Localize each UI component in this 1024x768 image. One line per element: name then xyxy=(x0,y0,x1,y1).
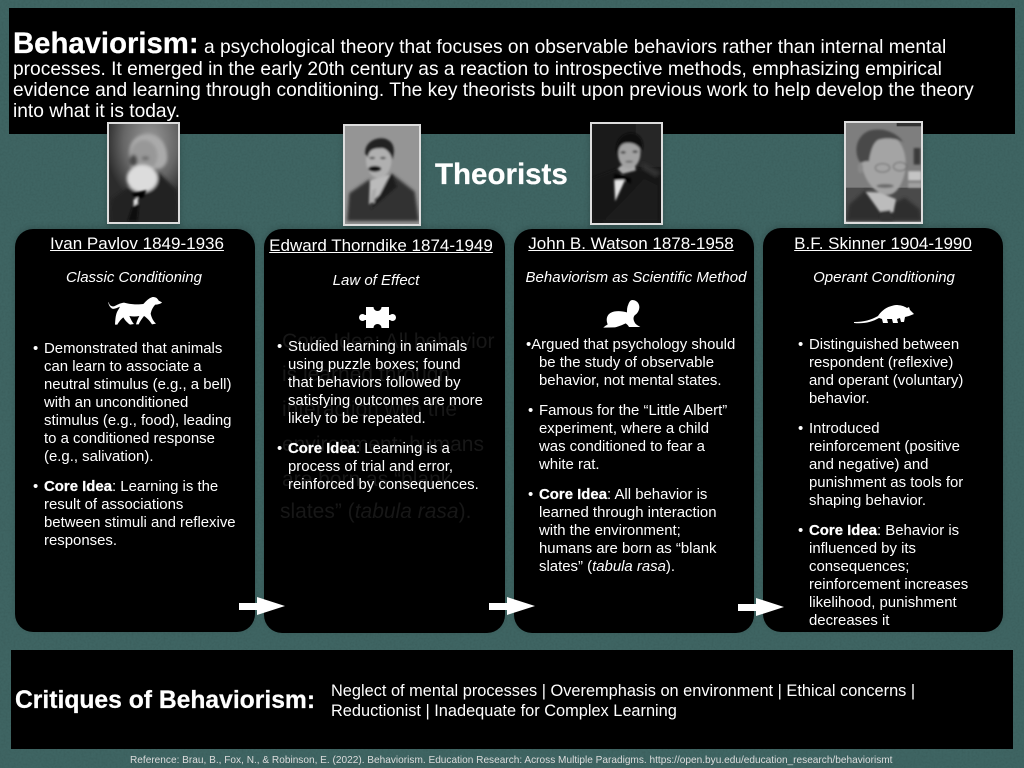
heading and definition text: evidence and learning through conditioning. The key theorists built upon previous work to help develop the theory xyxy=(13,80,974,101)
core idea: Thorndike xyxy=(277,440,479,493)
card subtitle: Operant Conditioning: Operant Conditioning xyxy=(813,269,955,286)
panel: critiques of behaviorism xyxy=(11,650,1013,749)
card title: B.F. Skinner: B.F. Skinner 1904-1990 xyxy=(794,234,972,253)
core idea: Watson: slates” (tabula rasa). xyxy=(539,558,675,575)
text: • xyxy=(798,420,803,437)
bullets: Skinner respondent and operant: respondent (reflexive) xyxy=(809,354,953,371)
bullets: Pavlov: to a conditioned response xyxy=(44,430,215,447)
bullets: Little Albert: white rat. xyxy=(539,456,600,473)
bullets: Thorndike xyxy=(277,338,483,427)
icon: puzzle piece xyxy=(359,307,396,328)
critiques list xyxy=(331,682,915,720)
critiques list: Reductionist | Inadequate for Complex Learning xyxy=(331,702,677,720)
text: • xyxy=(277,440,282,457)
ghost text behind Thorndike bullets: is learned through xyxy=(282,363,450,386)
core idea: Pavlov: Core Idea: Learning is the xyxy=(44,478,218,495)
bullets: Thorndike: satisfying outcomes are more xyxy=(288,392,483,409)
core idea: Skinner: consequences; xyxy=(809,558,909,575)
text: • xyxy=(798,336,803,353)
bullets: Skinner reinforcement: and negative) and xyxy=(809,456,928,473)
bullets: Watson argued xyxy=(526,336,735,389)
core idea: Skinner: Core Idea: Behavior is xyxy=(809,522,959,539)
bullets: Skinner reinforcement: Introduced xyxy=(809,420,880,437)
ghost text behind Thorndike bullets: interaction with the xyxy=(282,398,457,421)
core idea: Pavlov: result of associations xyxy=(44,496,183,513)
ghost text behind Thorndike bullets xyxy=(280,330,494,523)
card title: Edward Thorndike: Edward Thorndike 1874-1949 xyxy=(269,236,493,255)
bullets: Pavlov: stimulus (e.g., food), leading xyxy=(44,412,231,429)
core idea: Thorndike: Core Idea: Learning is a xyxy=(288,440,450,457)
core idea: Skinner: decreases it xyxy=(809,612,889,629)
icon: crawling baby xyxy=(603,300,640,328)
icon: dog xyxy=(108,297,162,325)
bullets: Watson argued: be the study of observable xyxy=(539,354,714,371)
bullets: Pavlov: Demonstrated that animals xyxy=(44,340,222,357)
arrow: Watson to Skinner xyxy=(738,598,784,616)
photo: Ivan Pavlov xyxy=(107,122,180,224)
bullets: Pavlov: neutral stimulus (e.g., a bell) xyxy=(44,376,231,393)
bullets: Little Albert xyxy=(528,402,727,473)
core idea: Skinner: reinforcement increases xyxy=(809,576,968,593)
card subtitle: Classic Conditioning: Classic Conditioning xyxy=(66,269,202,286)
text: • xyxy=(798,522,803,539)
photo: B.F. Skinner xyxy=(844,121,923,224)
bullets: Pavlov: (e.g., salivation). xyxy=(44,448,153,465)
bullets: Pavlov xyxy=(33,340,231,465)
bullets: Skinner reinforcement: reinforcement (positive xyxy=(809,438,960,455)
bullets: Pavlov: with an unconditioned xyxy=(44,394,188,411)
bullets: Little Albert: Famous for the “Little Albert” xyxy=(539,402,727,419)
card subtitle: Law of Effect: Law of Effect xyxy=(333,272,419,289)
bullets: Skinner reinforcement xyxy=(798,420,963,509)
core idea: Watson xyxy=(528,486,717,575)
text: • xyxy=(33,340,38,357)
heading: Theorists: Theorists xyxy=(435,158,568,191)
text: • xyxy=(33,478,38,495)
photo: John B. Watson xyxy=(590,122,663,225)
bullets: Watson argued: behavior, not mental states. xyxy=(539,372,722,389)
card title: Ivan Pavlov: Ivan Pavlov 1849-1936 xyxy=(50,234,224,253)
text: • xyxy=(528,402,533,419)
core idea: Thorndike: reinforced by consequences. xyxy=(288,476,479,493)
core idea: Pavlov: responses. xyxy=(44,532,117,549)
bullets: Watson argued: •Argued that psychology should xyxy=(526,336,735,353)
ghost text behind Thorndike bullets: environment; humans xyxy=(282,433,484,456)
header panel: definition of behaviorism xyxy=(9,8,1015,134)
bullets: Skinner respondent and operant: Distinguished between xyxy=(809,336,959,353)
core idea: Watson: Core Idea: All behavior is xyxy=(539,486,707,503)
heading and definition text: into what it is today. xyxy=(13,101,180,122)
bullets: Skinner reinforcement: punishment as tools for xyxy=(809,474,963,491)
card: Ivan Pavlov xyxy=(15,229,255,632)
bullets: Little Albert: experiment, where a child xyxy=(539,420,709,437)
core idea: Skinner xyxy=(798,522,968,629)
bullets: Skinner respondent and operant: behavior. xyxy=(809,390,870,407)
heading and definition text: processes. It emerged in the early 20th century as a reaction to introspective methods, emphasizing empirical xyxy=(13,59,942,80)
heading and definition text: Behaviorism: a psychological theory that focuses on observable behaviors rather than internal mental xyxy=(13,27,946,60)
text: • xyxy=(528,486,533,503)
reference citation: Reference: Brau, B., Fox, N., & Robinson, E. (2022). Behaviorism. Education Research: Across Multiple Paradigms. https://open.byu.edu/education_research/behaviorismt xyxy=(130,755,892,766)
card: John B. Watson xyxy=(514,229,754,633)
ghost text behind Thorndike bullets: slates” (tabula rasa). xyxy=(280,500,471,523)
arrow: Thorndike to Watson xyxy=(489,597,535,615)
card subtitle: Behaviorism as Scientific Method: Behaviorism as Scientific Method xyxy=(526,269,746,286)
ghost text behind Thorndike bullets: Core Idea: All behavior xyxy=(282,330,494,353)
heading and definition text xyxy=(13,27,974,122)
card title: John B. Watson: John B. Watson 1878-1958 xyxy=(528,234,734,253)
bullets: Skinner reinforcement: shaping behavior. xyxy=(809,492,926,509)
core idea: Thorndike: process of trial and error, xyxy=(288,458,453,475)
bullets: Little Albert: was conditioned to fear a xyxy=(539,438,705,455)
card: B.F. Skinner xyxy=(763,228,1003,632)
icon: rat xyxy=(854,305,914,324)
bullets: Skinner respondent and operant: and operant (voluntary) xyxy=(809,372,963,389)
heading: critiques: Critiques of Behaviorism: xyxy=(15,687,315,714)
card: Edward Thorndike xyxy=(264,229,505,633)
core idea: Skinner: influenced by its xyxy=(809,540,916,557)
core idea: Pavlov: between stimuli and reflexive xyxy=(44,514,236,531)
bullets: Pavlov: can learn to associate a xyxy=(44,358,202,375)
arrow: Pavlov to Thorndike xyxy=(239,597,285,615)
core idea: Watson: with the environment; xyxy=(539,522,681,539)
photo: Edward Thorndike xyxy=(343,124,421,226)
core idea: Watson: learned through interaction xyxy=(539,504,717,521)
core idea: Pavlov xyxy=(33,478,236,549)
core idea: Watson: humans are born as “blank xyxy=(539,540,717,557)
core idea: Skinner: likelihood, punishment xyxy=(809,594,957,611)
bullets: Thorndike: Studied learning in animals xyxy=(288,338,467,355)
critiques list: Neglect of mental processes | Overemphasis on environment | Ethical concerns | xyxy=(331,682,915,700)
bullets: Thorndike: likely to be repeated. xyxy=(288,410,426,427)
bullets: Skinner respondent and operant xyxy=(798,336,963,407)
text: • xyxy=(277,338,282,355)
bullets: Thorndike: using puzzle boxes; found xyxy=(288,356,461,373)
ghost text behind Thorndike bullets: are born as “blank xyxy=(282,468,451,491)
bullets: Thorndike: that behaviors followed by xyxy=(288,374,461,391)
